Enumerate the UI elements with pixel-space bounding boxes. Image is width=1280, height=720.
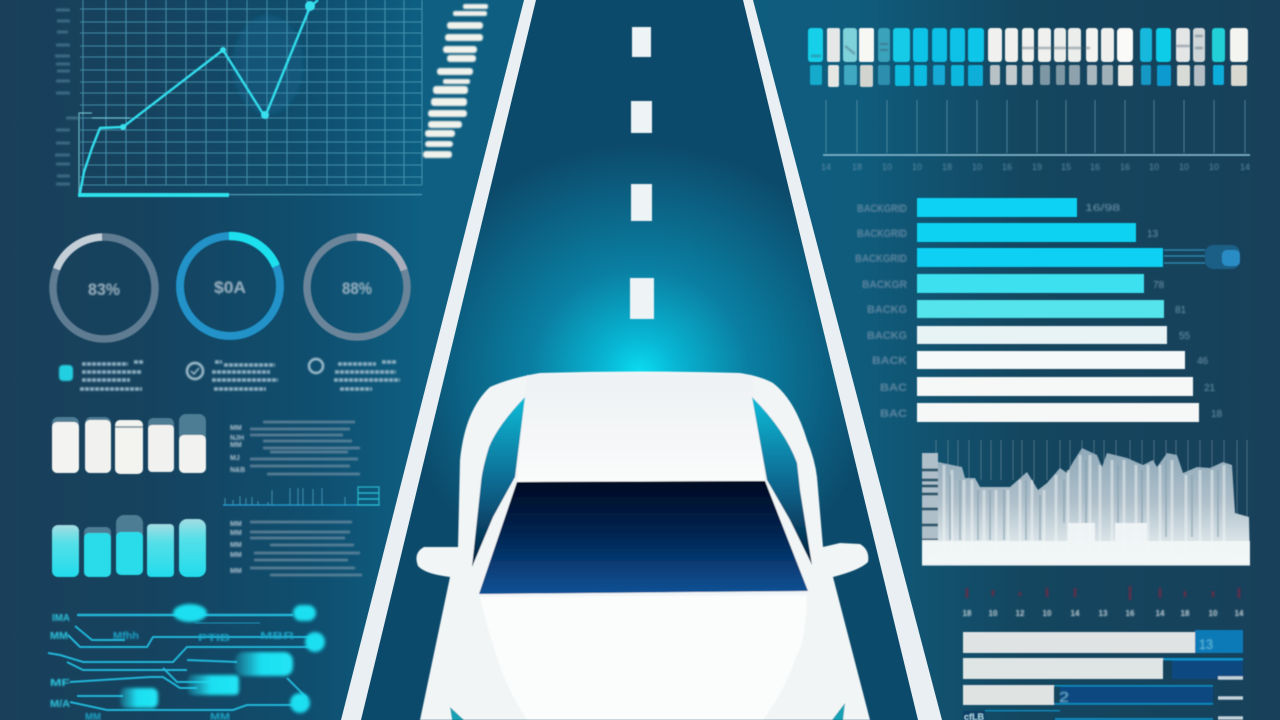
circuit diagram	[48, 604, 325, 720]
marker labels	[963, 609, 1244, 618]
car	[416, 372, 870, 720]
circuit labels: MF	[50, 678, 70, 689]
column axis labels: 16	[1120, 162, 1130, 172]
column axis labels: 14	[1240, 162, 1250, 172]
left side window	[472, 397, 525, 567]
column axis labels: 10	[1179, 162, 1189, 172]
marker labels: 10	[1043, 609, 1052, 618]
ring 2: $0A	[214, 278, 246, 297]
windshield	[479, 481, 808, 594]
text rows upper: MJ	[230, 455, 240, 462]
caption 3	[309, 359, 400, 389]
white spike bars	[423, 4, 488, 158]
bar values: 16/98	[1085, 203, 1121, 214]
text rows lower: MM	[230, 521, 242, 528]
bar labels: BACKG	[867, 330, 907, 342]
bar labels: BACKG	[867, 304, 907, 316]
trend markers	[120, 1, 315, 130]
bar connector	[1164, 245, 1240, 269]
area base line	[922, 564, 1250, 566]
lower progress bars	[963, 630, 1243, 720]
text rows lower	[230, 521, 362, 575]
bar values: 13	[1147, 229, 1159, 240]
bar labels: BACKGRID	[857, 228, 907, 240]
circuit mini text	[85, 631, 295, 720]
bar labels: BACK	[872, 355, 907, 367]
column axis labels: 10	[882, 162, 892, 172]
bar values	[1085, 203, 1223, 420]
car hood	[480, 595, 807, 720]
column axis labels	[821, 162, 1250, 172]
circuit labels	[50, 613, 70, 710]
road centre dashes	[630, 27, 654, 319]
text rows lower: MM	[230, 552, 242, 559]
column axis labels: 10	[912, 162, 922, 172]
circuit mini text: PTIB	[198, 633, 230, 644]
marker labels: 14	[1071, 609, 1080, 618]
marker labels: 14	[1235, 609, 1244, 618]
caption 1	[59, 362, 144, 389]
chart grid	[80, 0, 422, 185]
text rows upper: N&B	[230, 467, 245, 474]
column axis labels: 10	[1209, 162, 1219, 172]
progress bar 3: 2	[1059, 689, 1069, 706]
chart centre glow	[232, 15, 304, 115]
circuit traces	[48, 615, 310, 710]
marker labels: 10	[989, 609, 998, 618]
column axis labels: 16	[1002, 162, 1012, 172]
upper column row	[808, 28, 1248, 62]
top column chart	[808, 28, 1250, 172]
right tick labels	[1218, 678, 1243, 718]
marker labels: 13	[1099, 609, 1108, 618]
column axis labels: 10	[972, 162, 982, 172]
progress bar 2	[963, 658, 1243, 679]
line chart	[55, 0, 422, 197]
circuit labels: MM	[50, 631, 68, 642]
right road edge line	[743, 0, 942, 720]
bar values: 81	[1175, 305, 1187, 316]
lower column row	[810, 65, 1247, 87]
progress bar 1: 13	[1199, 636, 1213, 652]
bar labels: BAC	[880, 382, 907, 394]
circuit labels: IMA	[52, 613, 70, 624]
text rows upper	[230, 422, 360, 474]
chart baseline	[78, 193, 422, 197]
bars	[917, 198, 1199, 422]
right side window	[752, 397, 812, 565]
progress bar 3	[963, 685, 1213, 706]
bar values: 55	[1179, 331, 1191, 342]
car roof panel	[517, 375, 765, 482]
marker labels: 18	[963, 609, 972, 618]
horizontal bar chart	[855, 198, 1240, 422]
ring 3	[307, 237, 407, 337]
chart y-axis ticks	[55, 10, 78, 184]
car body	[416, 372, 870, 720]
ring captions	[59, 359, 400, 389]
marker labels: 12	[1016, 609, 1025, 618]
column axis	[823, 100, 1250, 155]
bar labels	[855, 203, 907, 420]
trend line	[80, 0, 318, 193]
text rows upper: MM	[230, 425, 242, 432]
text rows lower: MM	[230, 542, 242, 549]
bar values: 46	[1197, 356, 1209, 367]
stacked area chart	[922, 440, 1250, 566]
cyan pill bars	[52, 515, 206, 577]
text rows lower: MM	[230, 568, 242, 575]
ring 1	[53, 237, 155, 339]
progress bar 4	[963, 710, 1213, 720]
text rows upper: NJH	[230, 435, 244, 442]
circuit labels: M/A	[50, 699, 70, 710]
column axis labels: 19	[1032, 162, 1042, 172]
left headlight	[450, 707, 464, 720]
column axis labels: 15	[1061, 162, 1071, 172]
bar values: 78	[1153, 280, 1165, 291]
grid lines	[936, 440, 1247, 520]
area stripes	[944, 455, 1224, 560]
column details	[811, 36, 1203, 56]
road surface	[352, 0, 930, 720]
column axis labels: 18	[942, 162, 952, 172]
caption 2	[187, 362, 278, 389]
circuit mini text: Mfhh	[113, 631, 139, 642]
circuit nodes	[120, 604, 325, 713]
text rows upper: MM	[230, 442, 242, 449]
column axis labels: 16	[1090, 162, 1100, 172]
left road edge line	[341, 0, 536, 720]
bar values: 18	[1211, 409, 1223, 420]
marker labels: 10	[1209, 609, 1218, 618]
column axis labels: 14	[821, 162, 831, 172]
area silhouette	[922, 448, 1250, 565]
mini sparkline strip	[223, 487, 380, 505]
bar labels: BACKGR	[862, 279, 907, 291]
bar labels: BACKGRID	[855, 253, 907, 265]
ring 1: 83%	[88, 280, 120, 299]
red ticks	[967, 586, 1239, 600]
white pill bars	[52, 414, 206, 474]
ring 3: 88%	[342, 279, 372, 298]
column axis labels: 10	[1149, 162, 1159, 172]
circuit mini text: MBR	[260, 631, 295, 642]
column marker row	[963, 586, 1244, 618]
chart bracket	[79, 113, 130, 193]
ring gauges	[53, 236, 407, 339]
legend column	[922, 453, 938, 565]
bar values: 21	[1204, 383, 1216, 394]
marker labels: 16	[1126, 609, 1135, 618]
marker labels: 18	[1181, 609, 1190, 618]
bar labels: BACKGRID	[857, 203, 907, 215]
column axis labels: 18	[852, 162, 862, 172]
ring 2	[180, 236, 280, 336]
area front layer	[922, 523, 1250, 565]
progress bar 1	[963, 630, 1243, 653]
marker labels: 14	[1156, 609, 1165, 618]
text rows lower: MM	[230, 530, 242, 537]
bar labels: BAC	[880, 408, 907, 420]
right headlight	[832, 703, 845, 720]
